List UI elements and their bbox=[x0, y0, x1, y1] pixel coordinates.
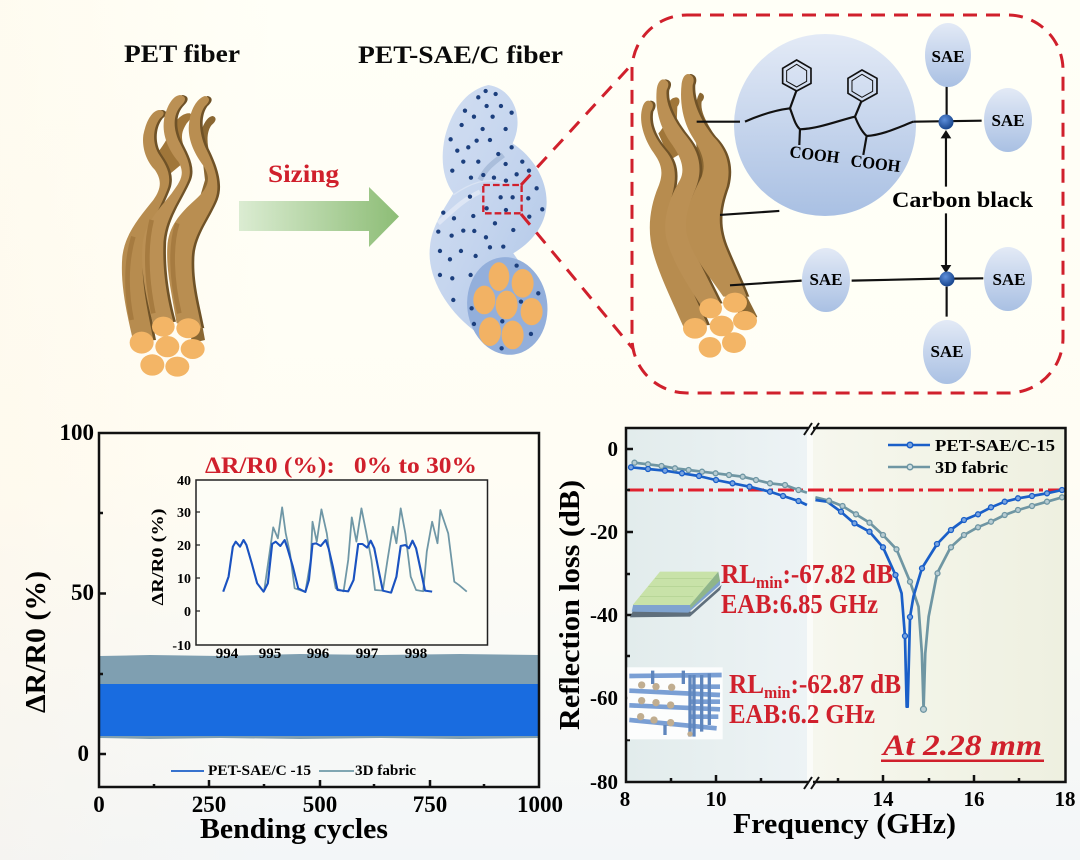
x tick labels: 500 bbox=[303, 792, 337, 817]
inset chart: 994 bbox=[216, 646, 239, 662]
annotation: layered RL and EAB: min bbox=[756, 573, 783, 592]
x tick labels: 16 bbox=[964, 787, 984, 811]
data band: PET-SAE/C-15 bbox=[100, 684, 538, 736]
x tick labels: 8 bbox=[620, 787, 630, 811]
x tick labels: 1000 bbox=[517, 792, 563, 817]
annotation: fabric RL and EAB bbox=[729, 669, 901, 729]
label: PET fiber: PET fiber bbox=[124, 41, 240, 68]
plot frame and ticks bbox=[626, 428, 1066, 782]
y tick labels: 0 bbox=[608, 437, 618, 461]
label: COOH right: COOH bbox=[850, 151, 901, 176]
label: Sizing: Sizing bbox=[268, 161, 340, 188]
inset chart: ΔR/R0 (%) bbox=[148, 508, 167, 606]
curve markers bbox=[628, 460, 1064, 712]
x tick labels bbox=[93, 792, 563, 817]
inset chart bbox=[148, 474, 488, 662]
legend: 3D fabric bbox=[935, 458, 1008, 477]
SAE bubble right upper: SAE bbox=[991, 111, 1025, 130]
SAE bubble bottom: SAE bbox=[930, 342, 964, 361]
x tick labels: 18 bbox=[1054, 787, 1076, 811]
label: PET-SAE/C fiber: PET-SAE/C fiber bbox=[358, 42, 563, 69]
y tick labels: 100 bbox=[60, 420, 94, 445]
legend bbox=[171, 763, 417, 779]
annotation: fabric RL and EAB: :-62.87 dB bbox=[790, 669, 901, 699]
inset chart: 20 bbox=[177, 539, 191, 554]
y axis title: ΔR/R0 (%) bbox=[21, 571, 52, 713]
icon: 3D woven fabric bbox=[627, 667, 723, 739]
SAE bubble top: SAE bbox=[931, 47, 965, 66]
icon: PET fiber bundle in detail bbox=[641, 74, 757, 358]
y tick labels: 50 bbox=[71, 580, 94, 605]
y tick labels bbox=[590, 437, 618, 794]
x tick labels: 14 bbox=[872, 787, 894, 811]
icon: twisted PET-SAE/C fiber bbox=[430, 85, 554, 360]
inset chart: 30 bbox=[177, 506, 191, 521]
zoom connector lines bbox=[521, 62, 634, 350]
network connections bbox=[720, 85, 983, 317]
SAE bubble right lower bbox=[984, 247, 1032, 311]
axis break marks bbox=[804, 423, 819, 789]
x tick labels: 10 bbox=[706, 787, 726, 811]
inset heading: ΔR/R0 (%): 0% to 30% bbox=[205, 453, 477, 478]
annotation: layered RL and EAB: :-67.82 dB bbox=[782, 559, 893, 589]
annotation: At 2.28 mm: At 2.28 mm bbox=[881, 729, 1042, 762]
y tick labels: -40 bbox=[590, 603, 618, 627]
x axis title: Frequency (GHz) bbox=[733, 809, 956, 840]
label: COOH left: COOH bbox=[789, 142, 840, 167]
curve: 3D fabric bbox=[635, 463, 1062, 709]
y tick labels: -60 bbox=[590, 686, 618, 710]
inset chart: 0 bbox=[184, 605, 191, 620]
annotation: fabric RL and EAB: EAB:6.2 GHz bbox=[729, 699, 875, 729]
icon: layered green composite bbox=[630, 572, 722, 617]
inset chart: 998 bbox=[405, 646, 427, 662]
SAE bubble center lower: SAE bbox=[809, 270, 843, 289]
panel: zoomed fiber detail bbox=[632, 15, 1063, 393]
SAE bubble top bbox=[925, 23, 971, 87]
legend bbox=[888, 436, 1055, 477]
annotation: fabric RL and EAB: RL bbox=[729, 669, 767, 699]
y axis title: Reflection loss (dB) bbox=[554, 480, 586, 730]
label: Carbon black: Carbon black bbox=[892, 187, 1034, 212]
annotation: fabric RL and EAB: min bbox=[764, 683, 791, 702]
annotation: layered RL and EAB bbox=[721, 559, 893, 619]
x axis title: Bending cycles bbox=[200, 814, 388, 845]
polymer chain structure bbox=[697, 60, 913, 155]
y tick labels: -80 bbox=[590, 770, 618, 794]
legend: 3D fabric bbox=[355, 763, 417, 779]
inset chart: 40 bbox=[177, 474, 191, 489]
legend: PET-SAE/C -15 bbox=[208, 763, 311, 779]
inset chart: -10 bbox=[172, 639, 191, 654]
plot background bbox=[626, 428, 1065, 782]
legend: PET-SAE/C-15 bbox=[935, 436, 1055, 455]
threshold line bbox=[628, 488, 1065, 492]
plot frame and ticks bbox=[99, 433, 539, 787]
inset chart: 10 bbox=[177, 572, 191, 587]
icon: PET fiber bundle bbox=[122, 95, 220, 377]
carbon black node top bbox=[938, 114, 954, 130]
x tick labels: 250 bbox=[192, 792, 226, 817]
curve: PET-SAE/C-15 bbox=[631, 467, 1062, 707]
chart: reflection loss bbox=[554, 423, 1076, 840]
y tick labels bbox=[60, 420, 94, 766]
y tick labels: 0 bbox=[78, 741, 89, 766]
inset chart: 997 bbox=[356, 646, 379, 662]
carbon black node bottom bbox=[940, 272, 954, 286]
annotation: layered RL and EAB: RL bbox=[721, 559, 759, 589]
x tick labels: 0 bbox=[93, 792, 105, 817]
data band: 3D fabric bbox=[100, 654, 538, 739]
annotation: layered RL and EAB: EAB:6.85 GHz bbox=[721, 589, 878, 619]
x tick labels: 750 bbox=[413, 792, 447, 817]
x tick labels bbox=[620, 787, 1076, 811]
inset chart: 995 bbox=[259, 646, 281, 662]
SAE bubble right lower: SAE bbox=[992, 270, 1026, 289]
chart: bending cycles bbox=[21, 420, 563, 845]
SAE bubble right upper bbox=[984, 88, 1032, 152]
polymer sphere bbox=[734, 34, 916, 216]
inset chart: 996 bbox=[307, 646, 330, 662]
y tick labels: -20 bbox=[590, 520, 618, 544]
SAE bubble bottom bbox=[923, 320, 971, 384]
arrow: sizing process bbox=[239, 187, 399, 247]
SAE bubble center lower bbox=[802, 248, 850, 312]
